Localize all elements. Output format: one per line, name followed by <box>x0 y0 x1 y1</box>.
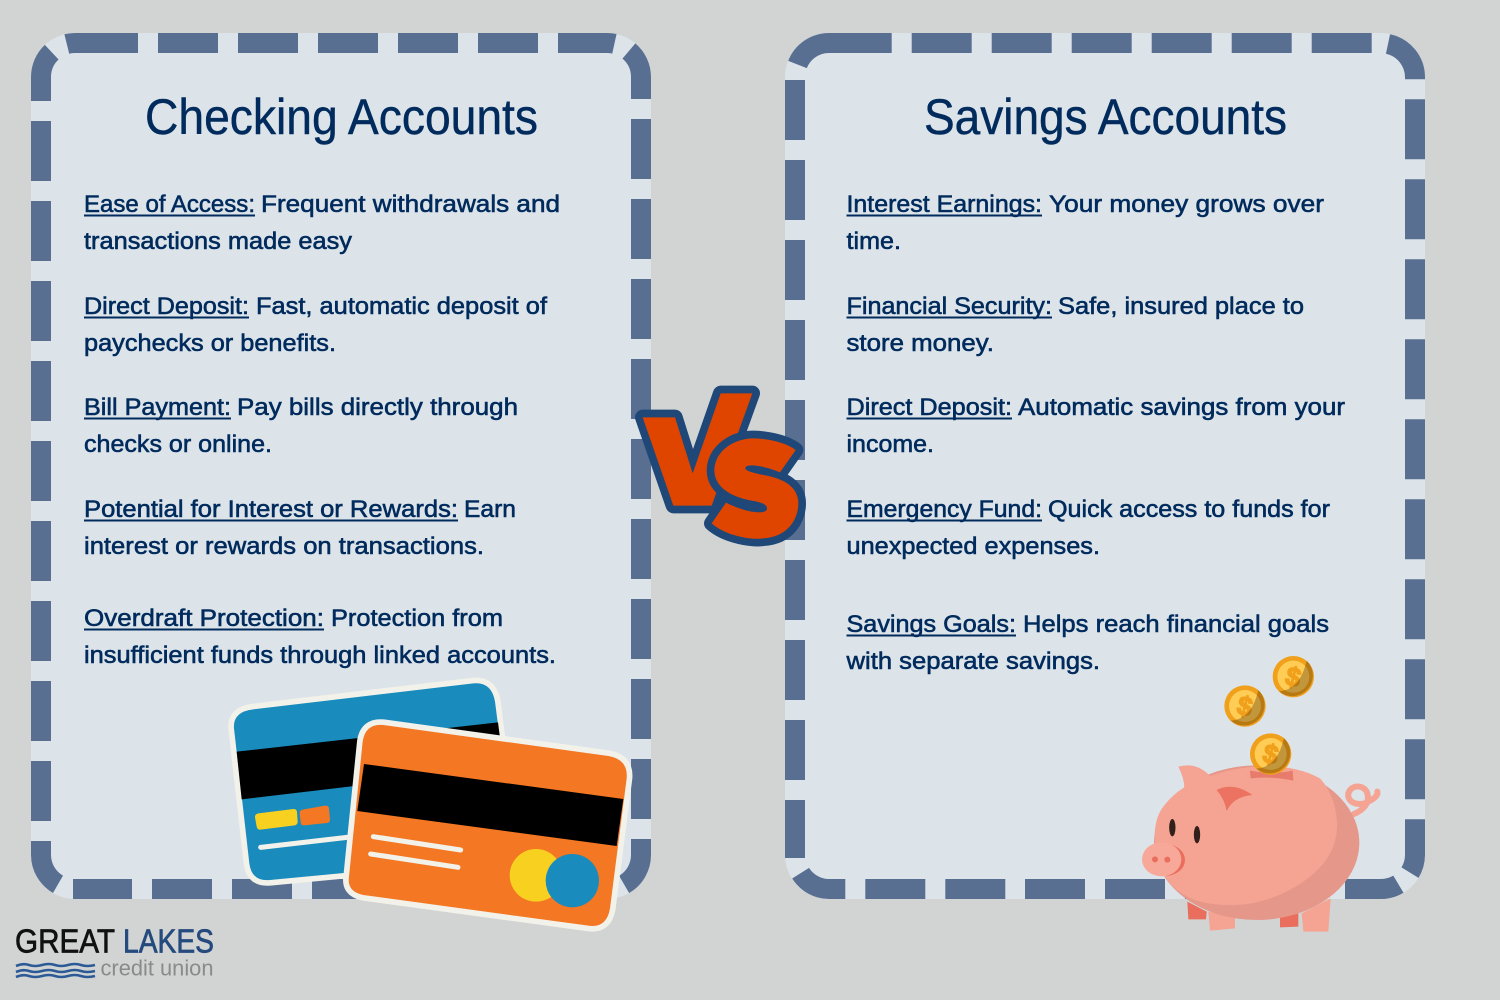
text block: interest earnings: Your money grows over <box>1049 191 1324 218</box>
panel: savings accounts <box>785 33 1425 899</box>
text block: savings goals: Savings Goals: <box>846 611 1016 638</box>
text block: interest earnings: time. <box>846 228 901 255</box>
text block: overdraft protection: insufficient funds through linked accounts. <box>84 642 556 669</box>
icon: credit cards <box>234 683 627 926</box>
text block: potential for interest or rewards: Potential for Interest or Rewards: <box>84 496 458 523</box>
text block: financial security: Financial Security: <box>846 293 1052 320</box>
text block: emergency fund <box>846 496 1330 560</box>
heading: savings accounts: Savings Accounts <box>924 89 1287 145</box>
coin: entering slot <box>1250 733 1291 775</box>
text block: emergency fund: unexpected expenses. <box>846 533 1100 560</box>
logo: great lakes credit union: GREAT <box>15 922 115 960</box>
text block: overdraft protection: Protection from <box>331 605 503 632</box>
text block: direct deposit: income. <box>846 431 934 458</box>
front legs <box>1208 898 1331 932</box>
text block: emergency fund: Emergency Fund: <box>846 496 1042 523</box>
text block: overdraft protection <box>84 605 556 669</box>
logo: great lakes credit union <box>15 922 214 980</box>
text block: ease of access <box>84 191 560 255</box>
coin: top right: $ <box>1282 661 1304 693</box>
logo waves <box>16 964 95 977</box>
text block: bill payment: checks or online. <box>84 431 272 458</box>
text block: direct deposit: paychecks or benefits. <box>84 330 336 357</box>
text block: interest earnings <box>846 191 1324 255</box>
text block: potential for interest or rewards <box>84 496 516 560</box>
text block: ease of access: Frequent withdrawals and <box>261 191 560 218</box>
coin: left: $ <box>1234 690 1256 723</box>
pig tail <box>1348 786 1378 814</box>
icon: piggy bank with coins <box>1142 656 1378 932</box>
orange card <box>349 725 627 926</box>
inner ear <box>1217 787 1252 811</box>
logo: great lakes credit union: LAKES <box>123 922 214 960</box>
letter S <box>712 438 798 539</box>
pig body <box>1154 765 1359 920</box>
text block: bill payment: Bill Payment: <box>84 394 231 421</box>
text block: direct deposit: Fast, automatic deposit of <box>256 293 547 320</box>
text block: financial security <box>846 293 1304 357</box>
text block: potential for interest or rewards: interest or rewards on transactions. <box>84 533 484 560</box>
text block: ease of access: Ease of Access: <box>84 191 255 218</box>
heading: checking accounts: Checking Accounts <box>145 89 538 145</box>
panel: checking accounts <box>31 33 651 899</box>
text block: savings goals: Helps reach financial goals <box>1023 611 1329 638</box>
text block: overdraft protection: Overdraft Protection: <box>84 605 324 632</box>
coin: entering slot: $ <box>1260 738 1282 771</box>
coin: top right <box>1273 656 1314 697</box>
text block: ease of access: transactions made easy <box>84 228 353 255</box>
text block: direct deposit <box>84 293 547 357</box>
coin slot <box>1250 771 1293 781</box>
pig snout <box>1142 842 1185 876</box>
back legs <box>1187 902 1298 927</box>
text block: potential for interest or rewards: Earn <box>464 496 516 523</box>
pig ear <box>1178 765 1210 794</box>
blue card <box>234 683 515 880</box>
text block: direct deposit: Direct Deposit: <box>846 394 1012 421</box>
text block: financial security: Safe, insured place to <box>1058 293 1304 320</box>
coin: left <box>1224 685 1266 727</box>
text block: financial security: store money. <box>846 330 994 357</box>
text block: savings goals: with separate savings. <box>845 648 1100 675</box>
text block: bill payment <box>84 394 518 458</box>
pig eyes <box>1169 819 1200 843</box>
text block: savings goals <box>845 611 1329 675</box>
text block: emergency fund: Quick access to funds for <box>1048 496 1330 523</box>
text block: interest earnings: Interest Earnings: <box>846 191 1042 218</box>
text block: direct deposit <box>846 394 1345 458</box>
letter V <box>643 393 752 506</box>
text block: bill payment: Pay bills directly through <box>237 394 518 421</box>
text block: direct deposit: Automatic savings from your <box>1018 394 1345 421</box>
text block: direct deposit: Direct Deposit: <box>84 293 249 320</box>
icon: versus badge <box>643 393 798 539</box>
logo: great lakes credit union: credit union <box>100 956 214 980</box>
